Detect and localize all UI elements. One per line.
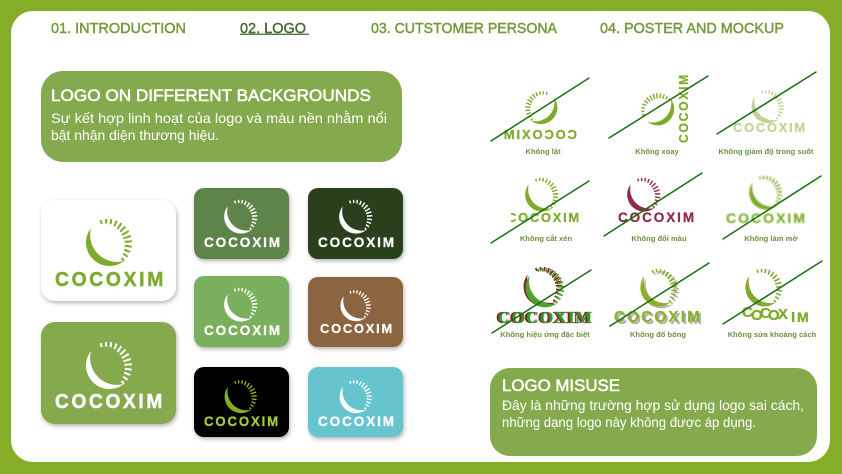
misuse: blurred: COCOXIM	[726, 210, 807, 226]
logo card: black: COCOXIM	[204, 413, 280, 429]
misuse: flipped: COCOXIM	[502, 127, 577, 142]
misuse: reduced transparency: COCOXIM	[733, 120, 807, 135]
misuse: drop shadow: Không đổ bóng	[630, 330, 686, 339]
misuse: blurred: Không làm mờ	[744, 234, 798, 243]
misuse: rotated: Không xoay	[635, 147, 679, 156]
logo card: mid green	[194, 188, 289, 259]
logo card: teal	[308, 367, 403, 437]
logo card: teal: COCOXIM	[318, 413, 396, 429]
logo card: light green: COCOXIM	[204, 322, 282, 338]
misuse: drop shadow	[610, 263, 709, 339]
heading: backgrounds: LOGO ON DIFFERENT BACKGROUNDS	[51, 86, 371, 105]
misuse: letter spacing: I	[791, 309, 795, 326]
misuse: drop shadow: COCOXIM	[616, 311, 704, 328]
panel: logo on different backgrounds	[41, 71, 402, 162]
logo card: brown	[308, 277, 403, 347]
nav item: customer persona: 03. CUTSTOMER PERSONA	[371, 21, 557, 37]
misuse: special effects: COCOXIM	[496, 308, 591, 327]
misuse: blurred	[723, 176, 821, 243]
logo card: dark green: COCOXIM	[318, 234, 396, 250]
misuse: reduced transparency	[717, 72, 816, 156]
misuse: drop shadow: COCOXIM	[614, 309, 702, 326]
misuse: special effects: COCOXIM	[498, 308, 593, 327]
text block: backgrounds description: bật nhận diện thương hiệu.	[51, 127, 219, 143]
misuse: special effects	[492, 267, 593, 339]
text block: misuse description: Đây là những trường hợp sử dụng logo sai cách,	[502, 397, 804, 413]
misuse: letter spacing: Không sửa khoảng cách	[728, 330, 817, 339]
misuse: rotated: COCOXIM	[676, 73, 691, 143]
heading: logo misuse: LOGO MISUSE	[502, 376, 620, 395]
misuse: letter spacing: C	[760, 305, 771, 322]
misuse: cropped: COCOXIM	[507, 210, 581, 225]
misuse: letter spacing: M	[797, 309, 809, 325]
misuse: flipped	[491, 78, 589, 156]
misuse: letter spacing: O	[751, 307, 763, 324]
misuse: rotated	[609, 73, 708, 156]
misuse: letter spacing: X	[778, 306, 788, 323]
misuse: cropped: Không cắt xén	[520, 234, 573, 243]
text block: misuse description	[502, 397, 804, 430]
navigation menu	[51, 21, 784, 37]
misuse: recoloured: Không đổi màu	[631, 234, 687, 243]
logo card: white background: COCOXIM	[55, 269, 166, 291]
logo card: white background	[41, 200, 176, 301]
logo card: mid green: COCOXIM	[204, 234, 282, 250]
logo card: brown: COCOXIM	[320, 321, 394, 336]
logo card: dark green	[308, 188, 403, 259]
misuse: letter spacing: O	[768, 307, 780, 324]
panel: logo misuse	[490, 368, 817, 456]
text block: backgrounds description: Sự kết hợp linh hoạt của logo và màu nền nhằm nổi	[51, 110, 387, 126]
logo card: light green	[194, 276, 289, 347]
nav item: logo active: 02. LOGO	[240, 21, 306, 37]
text block: backgrounds description	[51, 110, 387, 143]
text block: misuse description: những dạng logo này không được áp dụng.	[502, 414, 756, 430]
logo card: green background: COCOXIM	[55, 391, 165, 413]
misuse: letter spacing	[723, 261, 822, 339]
misuse: letter spacing: C	[742, 304, 753, 321]
misuse: special effects: Không hiệu ứng đặc biệt	[500, 330, 590, 339]
logo card: black	[194, 367, 289, 437]
nav item: poster and mockup: 04. POSTER AND MOCKUP	[600, 21, 784, 37]
misuse: cropped	[491, 178, 589, 243]
logo card: green background	[41, 322, 176, 424]
misuse: reduced transparency: Không giảm độ trong suốt	[719, 147, 814, 156]
nav item: introduction: 01. INTRODUCTION	[51, 21, 186, 37]
misuse: recoloured	[604, 173, 702, 243]
misuse: flipped: Không lật	[525, 147, 561, 156]
misuse: recoloured: COCOXIM	[618, 210, 696, 225]
